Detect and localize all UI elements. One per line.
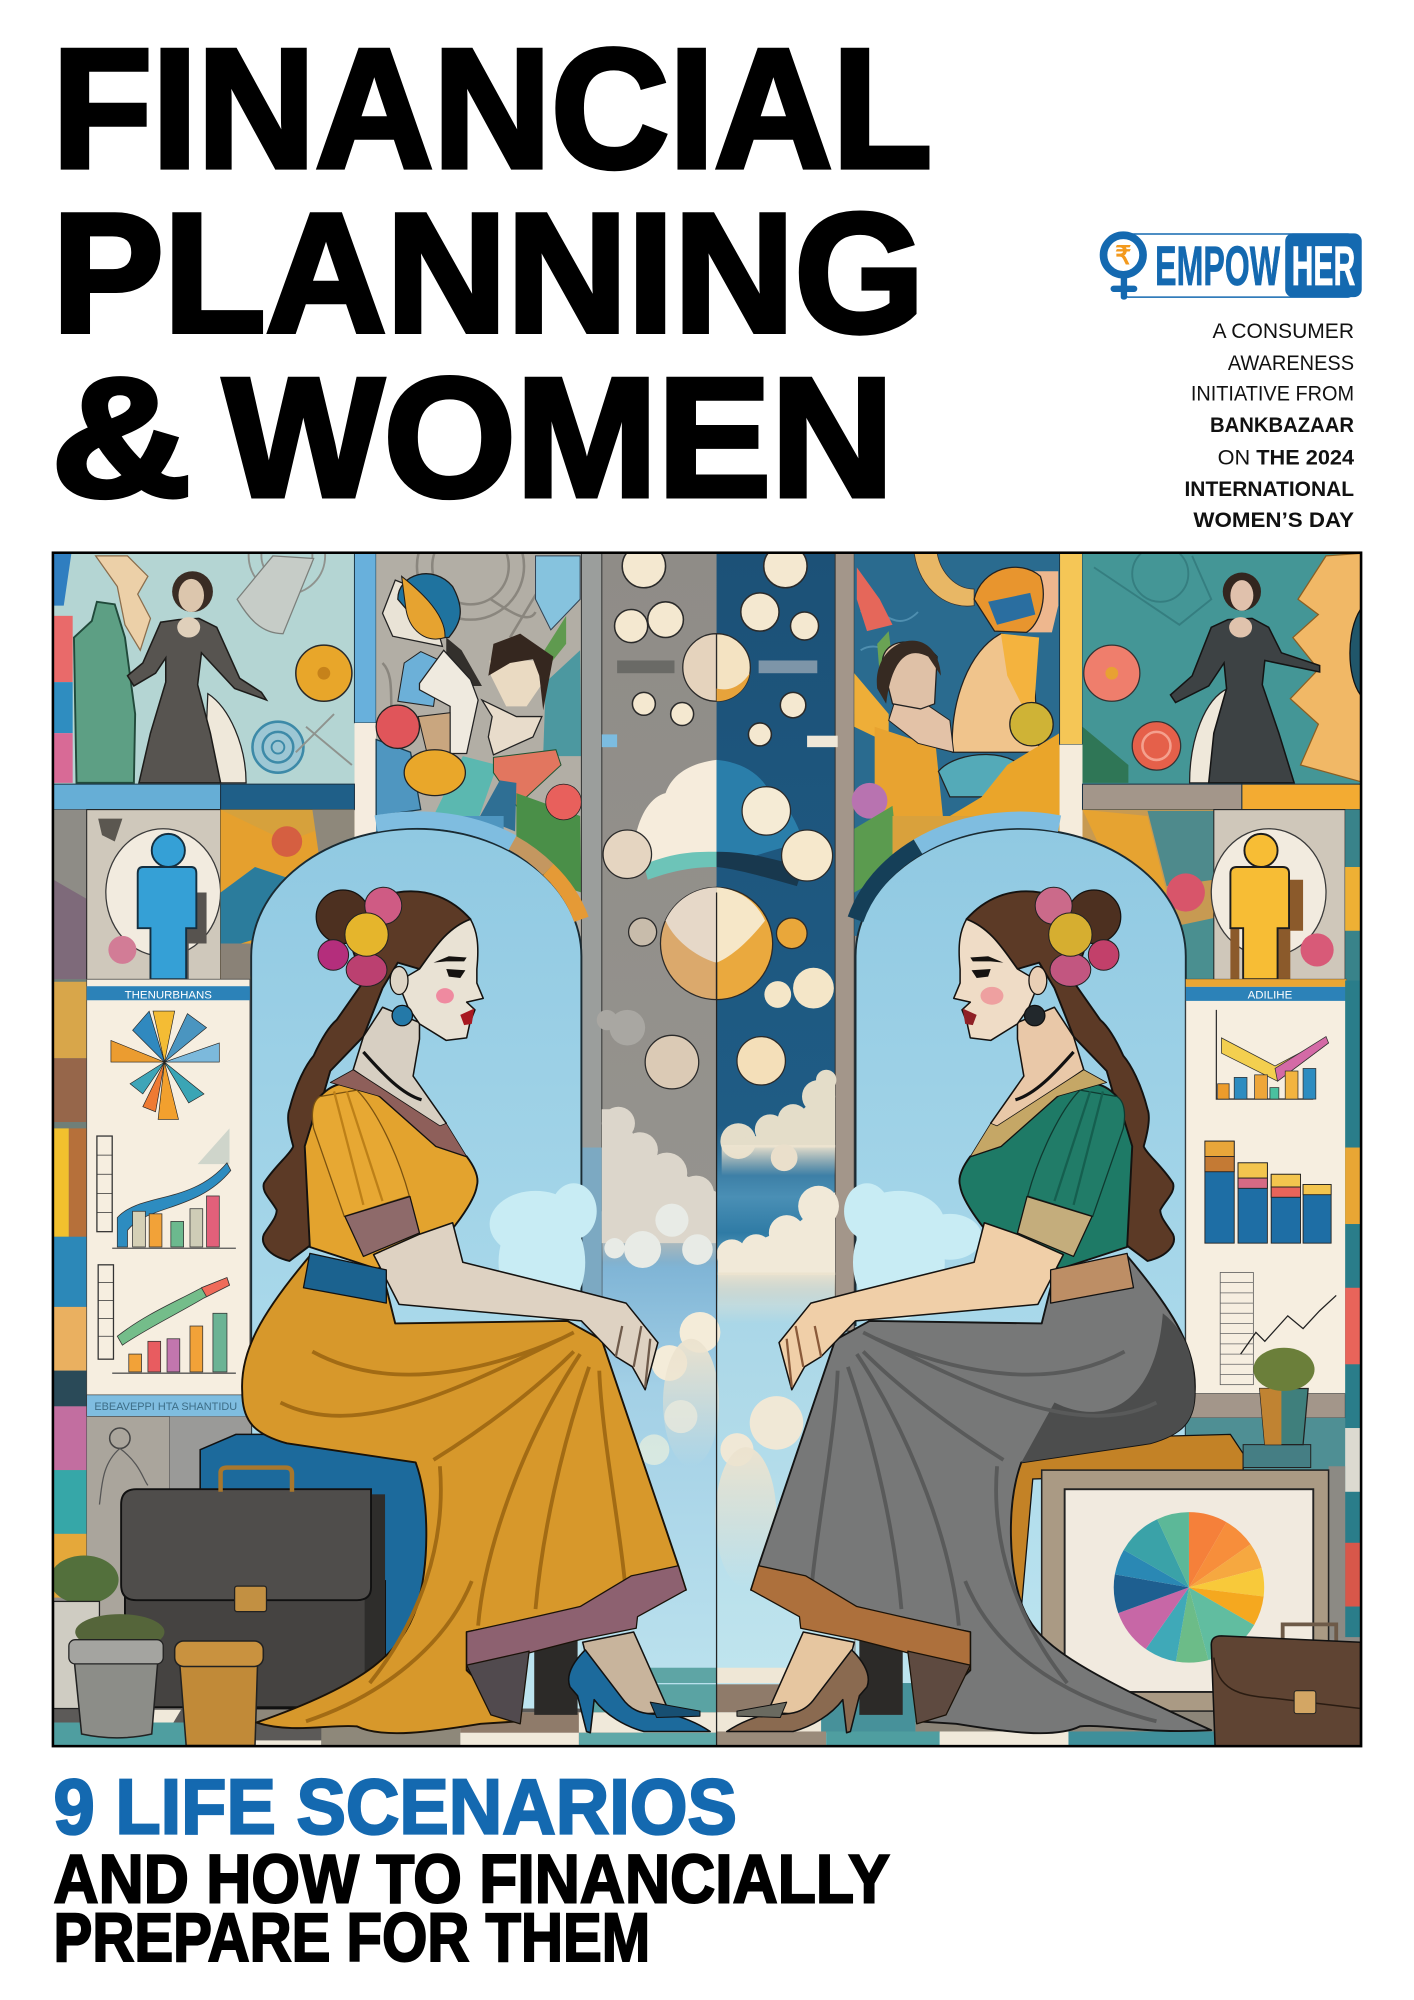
subtitle: PREPARE FOR THEM — [54, 1899, 650, 1976]
wall: left lower — [87, 1417, 251, 1621]
cheek — [436, 988, 454, 1003]
initiative text block: INTERNATIONAL — [1184, 478, 1354, 501]
lips — [460, 1009, 474, 1025]
arch trim: right dark — [856, 847, 918, 919]
neck and chest — [353, 1007, 446, 1130]
eye and brow — [434, 956, 467, 978]
skirt — [242, 1256, 686, 1733]
cheek — [980, 987, 1003, 1005]
artwork: two women facing each other — [50, 513, 1360, 1747]
cuff — [345, 1196, 419, 1256]
logo: EmpowHer: HER — [1292, 234, 1355, 297]
panel: top-right woman on teal — [1082, 546, 1360, 784]
poster: left charts: THENURBHANS — [125, 989, 212, 1001]
arch clouds — [490, 1183, 982, 1320]
initiative text block: AWARENESS — [1228, 352, 1354, 375]
dark under skirt — [859, 1640, 903, 1715]
woman: right in green top and grey skirt — [727, 887, 1211, 1733]
shoe — [569, 1650, 710, 1733]
lace — [908, 1651, 970, 1724]
sleeve — [312, 1090, 409, 1216]
chart: ladder and bars — [97, 1136, 231, 1247]
cuff — [1017, 1196, 1092, 1256]
ear — [1029, 966, 1047, 995]
subtitle: AND HOW TO FINANCIALLY — [54, 1840, 890, 1917]
stool and pot: right — [1012, 1348, 1315, 1604]
arms and hand — [779, 1223, 1063, 1390]
poster: left charts — [87, 979, 250, 1396]
arch trim: left tan — [513, 843, 548, 870]
shoe — [727, 1650, 868, 1733]
initiative text block — [1184, 320, 1354, 532]
sleeve — [1028, 1090, 1125, 1216]
lace — [467, 1651, 529, 1724]
far shoe tip — [650, 1702, 700, 1717]
band and wall: right lower — [1186, 980, 1360, 1638]
chart: bars with arrow line — [1216, 1010, 1329, 1099]
chart: pie — [1151, 1550, 1227, 1625]
hair bun — [1067, 890, 1121, 944]
skirt folds — [812, 1332, 1156, 1721]
skirt folds — [281, 1332, 625, 1721]
fingers — [616, 1326, 650, 1387]
neck and chest — [991, 1007, 1084, 1130]
bodice — [305, 1084, 478, 1269]
title: PLANNING — [52, 178, 924, 368]
skirt hem border — [751, 1566, 970, 1670]
leg — [768, 1632, 854, 1715]
chart: second ladder and bars — [98, 1265, 230, 1372]
neckline border — [330, 1070, 467, 1156]
poster caption strip: left — [87, 1395, 250, 1417]
belt — [303, 1253, 386, 1303]
arch trim: right light — [918, 820, 1060, 847]
panel: two classical women left — [376, 513, 581, 936]
title — [51, 13, 932, 532]
poster: right charts — [1186, 979, 1346, 1396]
panel: left colour strip — [54, 979, 87, 1598]
subtitle — [54, 1764, 890, 1976]
belt — [1051, 1253, 1133, 1303]
flowers in hair — [318, 887, 402, 986]
picture frame with pie chart — [1042, 1470, 1329, 1711]
neckline border — [970, 1070, 1107, 1156]
bodice — [959, 1084, 1132, 1269]
far shoe tip — [737, 1702, 787, 1717]
center columns: grey and blue sky with bubbles — [581, 544, 854, 1746]
subtitle: 9 LIFE SCENARIOS — [54, 1764, 737, 1850]
center seam line — [716, 893, 718, 1746]
band: tan and orange divider — [1082, 784, 1360, 810]
panel: two classical women right — [852, 553, 1060, 936]
hair — [263, 891, 470, 1261]
skirt — [751, 1256, 1211, 1733]
ear — [390, 966, 408, 995]
necklace — [363, 1052, 422, 1100]
stool: left blue — [200, 1434, 434, 1709]
fingers — [787, 1326, 821, 1387]
artwork border — [53, 553, 1361, 1746]
poster caption strip: left: EBEAVEPPI HTA SHANTIDU — [94, 1401, 237, 1413]
face — [954, 919, 1039, 1040]
arms and hand — [374, 1223, 658, 1390]
logo: EmpowHer: EMPOW — [1155, 234, 1280, 297]
hair bun — [316, 890, 370, 944]
sleeve pleats — [334, 1091, 383, 1205]
arch trim: left orange — [548, 870, 581, 919]
leg — [583, 1632, 669, 1715]
initiative text block: WOMEN’S DAY — [1193, 509, 1354, 532]
hip shadow — [1021, 1313, 1195, 1462]
plants and pots — [50, 1556, 263, 1746]
panel: left mosaic row with blue person icon — [54, 810, 354, 982]
briefcase: dark grey — [121, 1468, 385, 1707]
title: & — [51, 342, 191, 532]
far leg and shoe — [534, 1640, 578, 1715]
arch trim: left blue — [376, 820, 513, 843]
decorative strip: blue and cream — [354, 553, 376, 863]
face — [398, 919, 483, 1040]
necklace — [1015, 1052, 1074, 1100]
initiative text block: A CONSUMER — [1213, 320, 1354, 343]
panel: right mosaic row with yellow person icon — [1082, 810, 1360, 980]
sleeve pleats — [1054, 1091, 1103, 1205]
chart: radial star — [111, 1011, 219, 1119]
earring — [1024, 1005, 1045, 1026]
initiative text block: ON THE 2024 — [1218, 447, 1354, 470]
decorative strip: yellow and cream — [1060, 553, 1082, 853]
flowers in hair — [1035, 887, 1119, 986]
initiative text block: INITIATIVE FROM — [1191, 382, 1354, 405]
arch: left — [251, 829, 581, 1747]
woman: left in yellow dress — [242, 887, 710, 1733]
panel: top-left woman in grey dress — [54, 554, 354, 784]
chart: stacked bars — [1205, 1141, 1331, 1243]
title: WOMEN — [223, 342, 894, 532]
clouds — [597, 1010, 839, 1587]
briefcase: brown — [1211, 1624, 1360, 1747]
initiative text block: BANKBAZAAR — [1210, 414, 1354, 437]
lips — [963, 1009, 977, 1025]
title: FINANCIAL — [52, 13, 932, 203]
earring — [392, 1005, 412, 1026]
band: blue divider — [54, 784, 354, 810]
poster: right charts: ADILIHE — [1248, 989, 1293, 1001]
floor — [54, 1668, 1221, 1747]
skirt hem border — [467, 1566, 686, 1670]
hair — [966, 891, 1174, 1261]
chart: line graph — [1220, 1272, 1336, 1385]
arch: right — [856, 829, 1186, 1747]
eye and brow — [970, 956, 1003, 978]
logo: EmpowHer: ₹ — [1115, 242, 1131, 270]
